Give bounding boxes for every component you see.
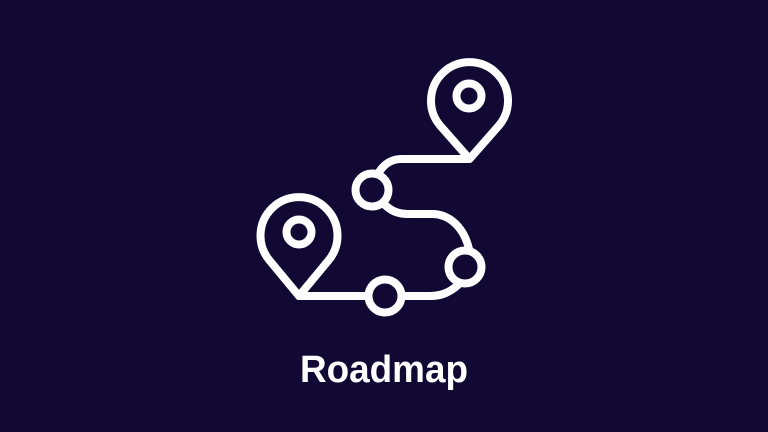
waypoint: upper circle xyxy=(356,174,388,206)
waypoint: right circle xyxy=(448,250,482,284)
icon: destination location pin xyxy=(431,62,508,159)
route path segments xyxy=(299,159,469,296)
icon: roadmap route with pins xyxy=(260,62,508,312)
waypoint: bottom circle xyxy=(368,280,402,312)
icon: start location pin xyxy=(260,197,338,296)
title: Roadmap xyxy=(300,349,468,391)
